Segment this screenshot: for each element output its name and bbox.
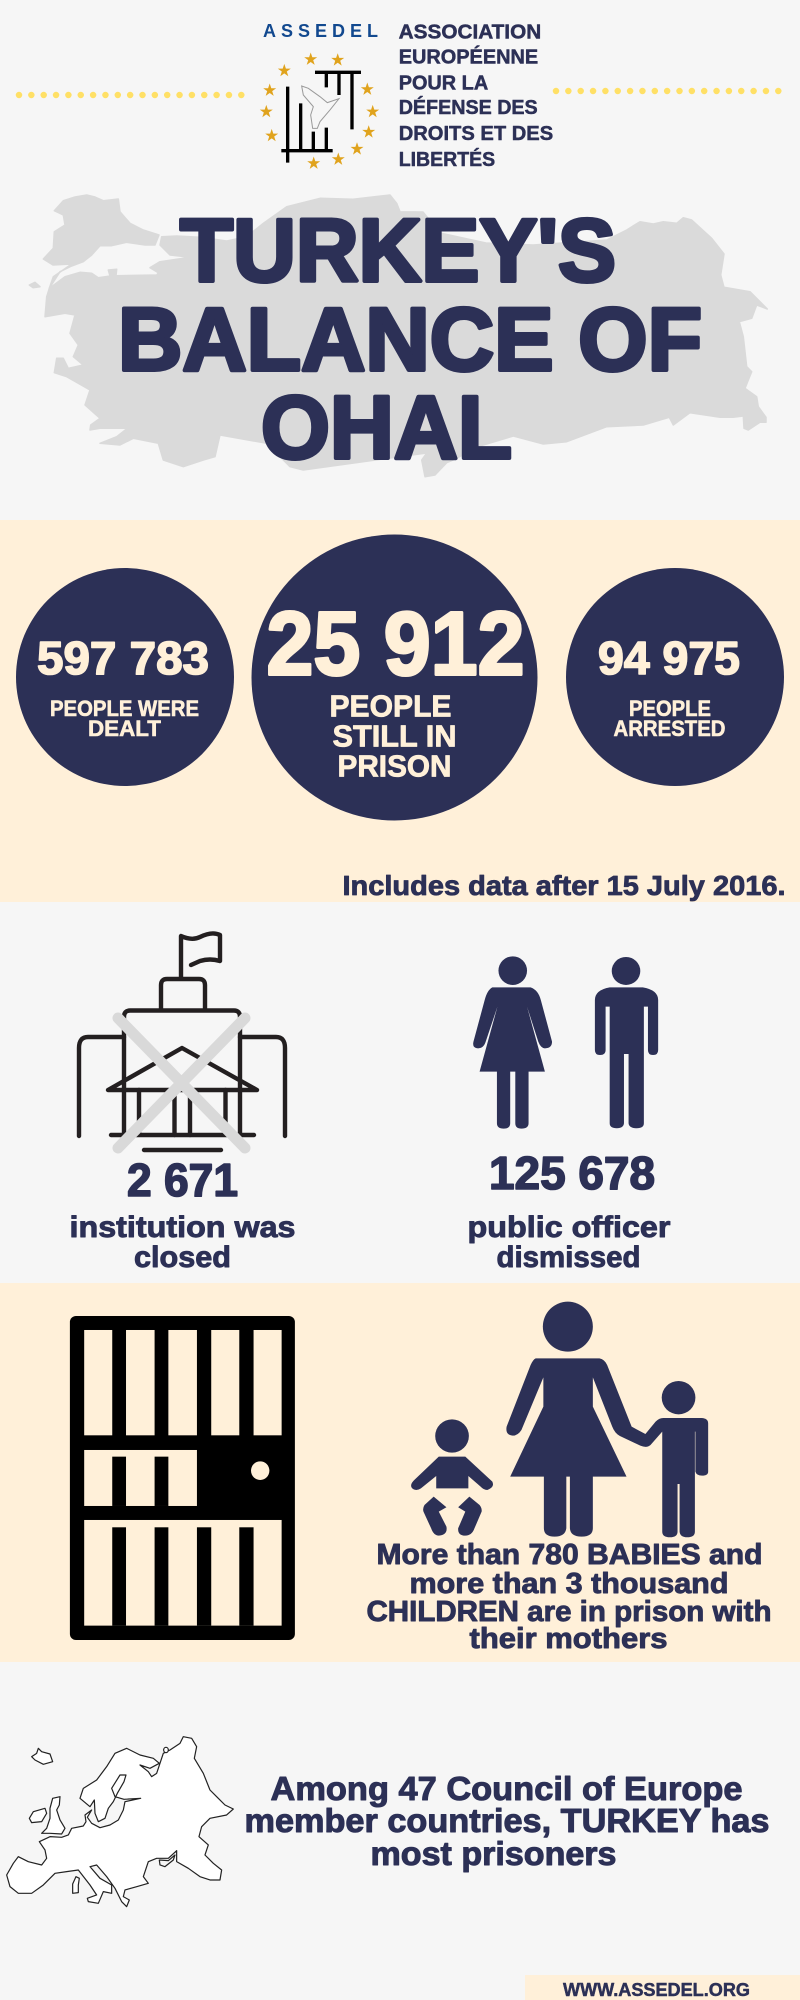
logo: stars, prison bars and dove xyxy=(260,52,379,169)
statement: Turkey has most prisoners xyxy=(244,1770,770,1872)
figure: institutions: 2 671 xyxy=(127,1154,238,1206)
circle: people still in prison xyxy=(252,534,538,820)
icon: prison door xyxy=(70,1316,295,1640)
label: public officer dismissed: public officer xyxy=(468,1211,671,1244)
statement: babies and children: their mothers xyxy=(470,1623,668,1655)
association name: EUROPÉENNE xyxy=(399,45,538,68)
icon: map of Europe xyxy=(7,1737,233,1907)
dotted line right xyxy=(556,88,782,94)
label: institution was closed: closed xyxy=(134,1241,231,1274)
data note: Includes data after 15 July 2016. xyxy=(342,870,786,901)
label: public officer dismissed xyxy=(468,1211,671,1274)
statement: babies and children: CHILDREN are in prison with xyxy=(366,1596,772,1628)
circle: people still in prison: 25 912 xyxy=(266,594,524,694)
association name: DROITS ET DES xyxy=(399,122,553,145)
association name xyxy=(399,20,553,171)
association name: ASSOCIATION xyxy=(399,20,541,43)
icon: crossed-out institution building xyxy=(79,933,285,1150)
icon: mother, child and baby xyxy=(411,1302,708,1537)
circle: people still in prison: STILL IN xyxy=(332,718,456,754)
figure: officers: 125 678 xyxy=(489,1147,655,1199)
circle: people still in prison: PRISON xyxy=(338,748,452,784)
footer: website: WWW.ASSEDEL.ORG xyxy=(563,1979,750,2000)
label: institution was closed xyxy=(70,1211,296,1274)
panel: Council of Europe comparison xyxy=(7,1737,769,1907)
circle: people dealt xyxy=(16,568,234,786)
association name: LIBERTÉS xyxy=(399,148,495,171)
circle: people arrested: ARRESTED xyxy=(614,716,726,741)
circle: people arrested: PEOPLE xyxy=(629,696,711,721)
panel: babies and children in prison xyxy=(0,1283,800,1662)
statement: babies and children: more than 3 thousand xyxy=(410,1568,728,1600)
label: institution was closed: institution was xyxy=(70,1211,296,1244)
panel: officers dismissed xyxy=(468,956,671,1274)
icon: woman and man xyxy=(473,956,658,1129)
statement: Turkey has most prisoners: most prisoners xyxy=(370,1835,616,1872)
panel: key figures xyxy=(0,520,800,902)
circle: people still in prison: PEOPLE xyxy=(330,688,452,724)
statement: Turkey has most prisoners: member countries, TURKEY has xyxy=(244,1802,770,1839)
label: public officer dismissed: dismissed xyxy=(496,1241,640,1274)
circle: people dealt: DEALT xyxy=(88,716,162,741)
header: logo and association name xyxy=(19,20,782,171)
statement: babies and children xyxy=(366,1539,772,1655)
circle: people dealt: PEOPLE WERE xyxy=(50,696,199,721)
panel: institutions closed xyxy=(70,933,296,1274)
map of Turkey background xyxy=(29,195,767,477)
association name: POUR LA xyxy=(399,71,488,94)
circle: people arrested: 94 975 xyxy=(598,632,740,684)
title: OHAL xyxy=(261,377,512,477)
circle: people dealt: 597 783 xyxy=(37,632,209,684)
statement: Turkey has most prisoners: Among 47 Council of Europe xyxy=(270,1770,742,1807)
title: BALANCE OF xyxy=(118,289,702,389)
footer: website xyxy=(525,1975,800,2000)
dotted line left xyxy=(19,92,243,98)
title xyxy=(118,200,702,477)
circle: people arrested xyxy=(566,568,784,786)
logo wordmark: ASSEDEL xyxy=(263,21,378,41)
statement: babies and children: More than 780 BABIES and xyxy=(376,1539,762,1571)
association name: DÉFENSE DES xyxy=(399,96,538,119)
title: TURKEY'S xyxy=(180,200,616,300)
